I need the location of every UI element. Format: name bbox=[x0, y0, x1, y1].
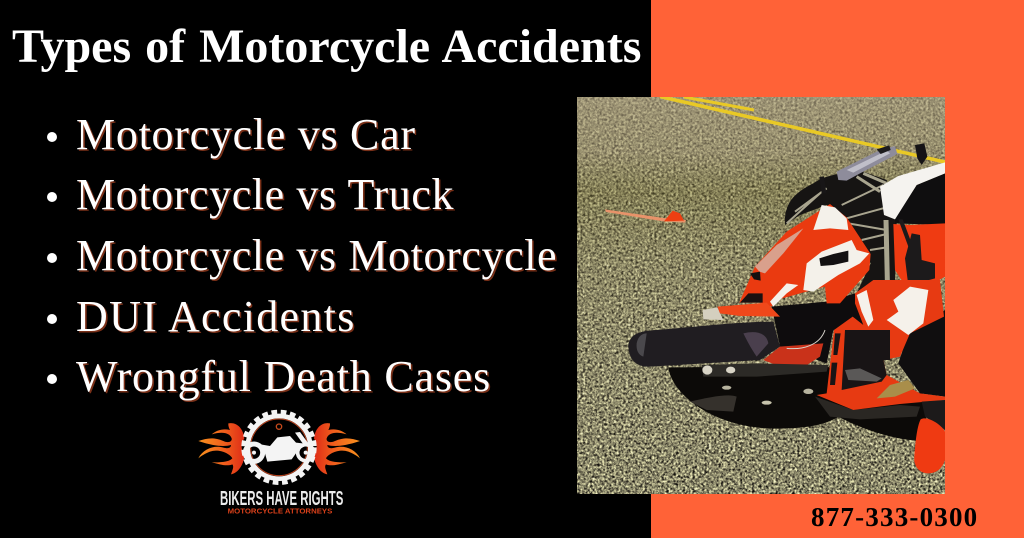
list item: truck: Motorcycle vs Truck bbox=[76, 170, 454, 219]
scraped fairing edge bbox=[877, 380, 915, 398]
motorcycle silhouette bbox=[245, 432, 314, 462]
dark engine area bbox=[785, 172, 897, 293]
logo subtitle: MOTORCYCLE ATTORNEYS bbox=[228, 508, 333, 515]
photo: crashed red motorcycle on asphalt bbox=[577, 97, 945, 494]
cone and paint strip bbox=[605, 209, 686, 223]
lower red fairing bbox=[817, 280, 945, 410]
fairing hole bbox=[819, 251, 848, 266]
red front fairing bbox=[739, 204, 871, 307]
right flames bbox=[314, 423, 360, 474]
left flames bbox=[198, 423, 244, 474]
orange tail piece bbox=[914, 400, 945, 473]
nose trim bbox=[703, 303, 780, 320]
list item: motorcycle: Motorcycle vs Motorcycle bbox=[76, 231, 557, 280]
list item: wrongful death: Wrongful Death Cases bbox=[76, 352, 491, 401]
black seat behind tank bbox=[895, 173, 945, 225]
fairing white damage bbox=[770, 205, 869, 307]
engine chrome fins bbox=[787, 173, 887, 280]
red wheel hub bbox=[763, 343, 823, 369]
phone number: 877-333-0300 bbox=[811, 502, 978, 532]
front tyre bbox=[628, 322, 780, 367]
lower fairing vents bbox=[830, 330, 890, 390]
list of accident types bbox=[47, 110, 557, 402]
yellow road lines bbox=[660, 96, 945, 162]
handlebar bbox=[837, 143, 927, 181]
list item: DUI: DUI Accidents bbox=[76, 292, 356, 341]
logo: Bikers Have Rights bbox=[198, 410, 360, 515]
list item: car: Motorcycle vs Car bbox=[76, 110, 416, 159]
shadow bbox=[668, 367, 933, 441]
gear emblem bbox=[244, 412, 314, 483]
orange background panel bbox=[651, 0, 1024, 538]
lower fairing white damage bbox=[857, 287, 928, 335]
motorcycle wreck bbox=[605, 143, 945, 473]
emblem mark bbox=[276, 424, 282, 429]
red upper panel bbox=[893, 223, 945, 284]
fork and spots bbox=[702, 363, 828, 405]
asphalt road bbox=[577, 97, 945, 494]
white tank bbox=[880, 162, 945, 219]
title: Types of Motorcycle Accidents bbox=[12, 20, 641, 73]
